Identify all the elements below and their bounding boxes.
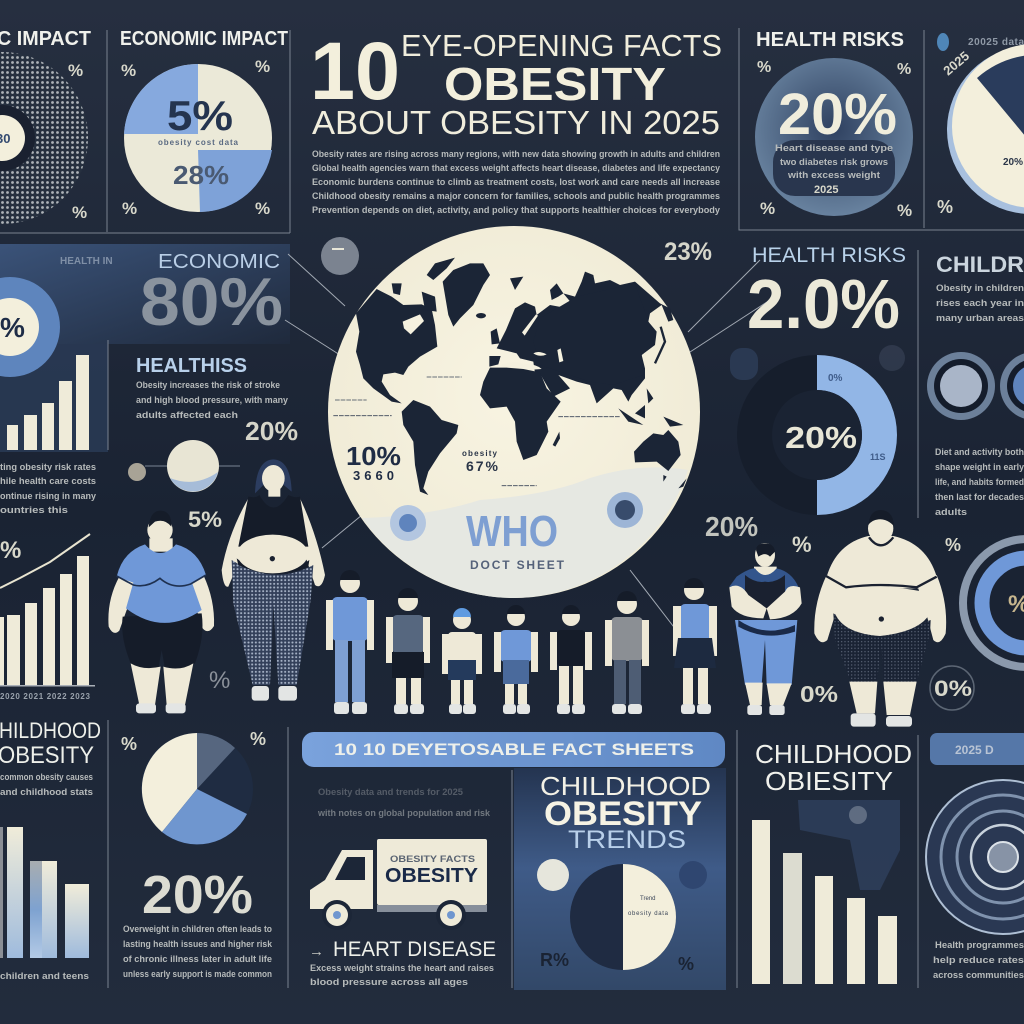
stat: 23 percent: 23% (664, 238, 712, 266)
continent: south america (402, 400, 458, 495)
child 3 (442, 608, 482, 714)
panel: health risks middle: 2.0% (747, 265, 900, 343)
panel: pie and 20 percent bottom: 20% (142, 865, 253, 925)
panel: childhood right: many urban areas (936, 313, 1024, 324)
panel: pie and 20 percent bottom: lasting health issues and higher risk (123, 939, 273, 950)
child 6 (605, 591, 649, 714)
text block: heart disease (310, 963, 494, 988)
svalbard (510, 277, 523, 290)
arctic islands (392, 258, 455, 312)
panel: childhood obesity right bars: OBIESITY (765, 766, 893, 796)
text block: under banner: with notes on global population and risk (317, 808, 491, 819)
panel: pie and 20 percent bottom: % (250, 729, 266, 749)
panel: childhood obesity bottom left: and childhood stats (0, 787, 93, 798)
panel: economic impact cropped: % (72, 203, 87, 222)
panel: health risks top: % (757, 59, 771, 76)
panel: health text (136, 355, 298, 446)
panel: ripple circle right: help reduce rates (933, 955, 1024, 966)
panel: health risks top: % (897, 61, 911, 78)
pie chart: obesity cost data (158, 138, 239, 147)
text block: intro (312, 149, 721, 216)
panel: ripple circle right (926, 733, 1024, 981)
panel: economic impact pie: % (255, 199, 270, 218)
panel: childhood obesity trends (514, 768, 726, 990)
panel: ripple circle right: 2025 D (955, 743, 994, 757)
stat: 10 percent: 3660 (353, 468, 394, 483)
stat: percent small: % (792, 532, 812, 557)
pie chart: 28% (173, 160, 229, 190)
icon: small badge (879, 345, 905, 371)
panel: pie top right: 20% (1003, 157, 1023, 168)
stat: 0 percent ring (930, 666, 974, 710)
panel: health risks top (755, 29, 913, 220)
text block: intro: Childhood obesity remains a major concern for families, schools and public health programmes (312, 191, 720, 202)
panel: childhood obesity right bars: CHILDHOOD (755, 739, 912, 769)
panel: childhood obesity trends: CHILDHOOD (540, 771, 711, 801)
panel: economic impact pie: % (255, 57, 270, 76)
panel: health text: adults affected each (136, 410, 238, 421)
panel: health risks top: HEALTH RISKS (756, 29, 904, 51)
iberia (489, 356, 501, 367)
label: who fact sheet: WHO (466, 507, 558, 556)
stat: 5 percent: 5% (188, 507, 222, 532)
panel: pie and 20 percent bottom: unless early support is made common (123, 969, 272, 980)
continent: australia (634, 430, 681, 471)
textured patch (798, 800, 900, 890)
panel: childhood obesity trends: TRENDS (568, 826, 686, 854)
panel: pie and 20 percent bottom: Overweight in children often leads to (123, 924, 272, 935)
icon: badge right (679, 861, 707, 889)
text block: under banner: Obesity data and trends for 2025 (318, 787, 464, 798)
pie chart: obesity data (628, 911, 669, 917)
figure: woman in blue shirt (108, 511, 214, 713)
panel: ripple circle right: across communities (933, 970, 1024, 981)
donut chart: 20% (785, 420, 857, 455)
panel: childhood obesity bottom left: OBESITY (0, 742, 94, 769)
donut chart: 11S (870, 452, 886, 462)
iceland (476, 313, 486, 318)
panel: childhood obesity bottom left: HILDHOOD (0, 718, 101, 743)
panel: childhood right: CHILDR (936, 252, 1024, 277)
asia solid fill (533, 283, 655, 385)
panel: pie top right: % (937, 197, 953, 217)
text block: left small copy: ting obesity risk rates (0, 462, 96, 473)
icon: map left: R% (540, 950, 569, 970)
title: OBESITY (444, 58, 666, 110)
bar chart (7, 355, 89, 450)
panel: ripple circle right: Health programmes (935, 940, 1024, 951)
text block: intro: Obesity rates are rising across many regions, with new data showing growth in adults and children (312, 149, 720, 160)
panel: economic impact pie: % (121, 61, 136, 80)
panel: childhood right: adults (935, 507, 967, 518)
panel: health risks top: Heart disease and type (775, 143, 893, 154)
panel: childhood obesity bottom left (0, 718, 101, 982)
madagascar (553, 432, 560, 447)
panel: economic left: HEALTH IN (60, 256, 113, 267)
panel: health risks middle: HEALTH RISKS (752, 244, 906, 267)
panel: childhood right: rises each year in (936, 298, 1024, 309)
panel: economic impact pie: % (122, 199, 137, 218)
heading: heart disease: HEART DISEASE (333, 938, 496, 961)
text block: left small copy (0, 462, 97, 516)
title: EYE-OPENING FACTS (401, 28, 722, 63)
panel: pie and 20 percent bottom: of chronic illness later in adult life (123, 954, 272, 965)
icon: right badge (607, 492, 643, 528)
icon: large target right: % (945, 535, 961, 555)
stat: map figures: obesity (462, 449, 498, 458)
panel: left donut and bars (0, 277, 89, 450)
pie chart (141, 733, 253, 845)
figures: row of children (326, 570, 717, 714)
panel: childhood right: Obesity in children (936, 283, 1024, 294)
title: 10 (310, 26, 400, 117)
panel: economic impact pie (120, 28, 288, 218)
panel: pie top right (937, 33, 1024, 217)
panel backgrounds (0, 244, 290, 452)
stat: 0 percent ring: 0% (934, 676, 972, 701)
icon: left badge (390, 505, 426, 541)
text block: intro: Global health agencies warn that excess weight affects heart disease, diabetes and life expectancy (312, 163, 721, 174)
icon: obesity truck: OBESITY (385, 865, 479, 887)
panel: health risks top: % (760, 199, 775, 218)
text block: intro: Economic burdens continue to climb as treatment costs, lost work and care needs all increase (312, 177, 720, 188)
line and bar chart left (0, 534, 95, 701)
continent: greenland (443, 263, 490, 327)
stat: 10 percent: 10% (346, 441, 401, 471)
continents (333, 258, 687, 495)
panel: pie top right: 20025 data (968, 37, 1024, 48)
banner: fact sheet: 10 10 DEYETOSABLE FACT SHEETS (334, 740, 694, 759)
lower globe shading (362, 467, 688, 598)
heading: heart disease: → (309, 943, 324, 960)
stat: zero percent mid: 0% (800, 681, 838, 707)
panel: economic left (60, 251, 283, 340)
stat: 10 percent (346, 441, 401, 483)
title (310, 26, 722, 141)
title: ABOUT OBESITY IN 2025 (312, 104, 720, 141)
connector lines (285, 254, 770, 635)
panel: childhood obesity bottom left: children and teens (0, 971, 89, 982)
continent: eurasia (497, 272, 673, 403)
panel: health risks top: 20% (778, 82, 897, 147)
donut chart (737, 355, 897, 515)
panel: health risks middle (730, 244, 906, 515)
panel: pie and 20 percent bottom (121, 729, 273, 980)
figure: large man (814, 510, 946, 727)
southeast asia islands (618, 388, 687, 488)
pie chart (570, 864, 676, 970)
bar chart (752, 820, 897, 984)
panel: economic left: 80% (140, 264, 283, 340)
icon: ring cropped (1000, 352, 1024, 420)
panel: health text: HEALTHISS (136, 355, 247, 377)
text block: heart disease: Excess weight strains the heart and raises (310, 963, 494, 974)
child 2 (386, 588, 430, 714)
child 5 (550, 605, 592, 714)
map annotations (333, 377, 620, 486)
stat: map figures (462, 449, 499, 474)
child 7 (673, 578, 717, 714)
bar chart (0, 827, 89, 958)
panel: pie top right: 2025 (940, 48, 972, 78)
icon: obesity truck (310, 839, 487, 930)
stat: 20 percent center right: 20% (705, 511, 758, 542)
panel: childhood obesity bottom left: common obesity causes (0, 772, 93, 783)
line and bar chart left: 2020 2021 2022 2023 (0, 692, 91, 701)
pie chart: Trend (640, 896, 655, 902)
panel: childhood right (927, 252, 1024, 518)
continent: africa (480, 368, 561, 460)
icon: ring (927, 352, 995, 420)
panel: economic left: ECONOMIC (158, 251, 280, 273)
text block: under banner (317, 787, 491, 819)
panel: health risks top: % (897, 201, 912, 220)
panel: pie and 20 percent bottom: % (121, 734, 137, 754)
panel: left donut and bars: % (0, 312, 25, 343)
panel: health text: 20% (245, 416, 298, 446)
seas (502, 314, 563, 370)
stat: small percent: % (209, 667, 230, 694)
child 1 (326, 570, 374, 714)
icon: map right: % (678, 954, 694, 974)
icon: pale sphere with small dot (128, 440, 240, 492)
text block: left small copy: hile health care costs (0, 476, 96, 487)
panel: economic impact pie: ECONOMIC IMPACT (120, 28, 288, 50)
panel: health text: and high blood pressure, with many (136, 395, 289, 406)
icon: globe marker (321, 237, 359, 275)
pie chart (124, 64, 272, 212)
icon: large target right (945, 535, 1024, 667)
icon: faded map patch (730, 348, 758, 380)
text block: left small copy: ontinue rising in many (0, 491, 97, 502)
panel: childhood obesity trends: OBESITY (544, 795, 702, 833)
panel: health risks top: two diabetes risk grows (780, 157, 888, 168)
text block: intro: Prevention depends on diet, activity, and policy that supports healthier choices for everybody (312, 205, 721, 216)
banner: fact sheet (302, 732, 725, 767)
world map globe (328, 226, 700, 598)
hudson bay (403, 314, 424, 334)
icon: badge left (537, 859, 569, 891)
panel: economic impact cropped (0, 28, 91, 224)
donut chart: 0% (828, 373, 843, 384)
figure: woman in black top and patterned leggings (222, 459, 325, 701)
icon: obesity truck: OBESITY FACTS (390, 854, 475, 864)
continent: north america (356, 289, 437, 403)
japan (655, 327, 665, 363)
panel: health risks top: 2025 (814, 184, 838, 196)
pie chart: 5% (167, 92, 233, 139)
child 4 (494, 605, 538, 714)
line and bar chart left: % (0, 537, 21, 564)
text block: heart disease: blood pressure across all ages (310, 977, 468, 988)
figure: woman arms crossed (729, 543, 802, 715)
label: who fact sheet: DOCT SHEET (470, 558, 565, 572)
panel: health risks top: with excess weight (787, 170, 881, 181)
text block: left small copy: ountries this (0, 505, 68, 516)
panel: health text: Obesity increases the risk of stroke (136, 380, 280, 391)
stat: map figures: 67% (466, 458, 499, 474)
panel: economic impact cropped: % (68, 61, 83, 80)
britain (491, 328, 500, 344)
panel: childhood obesity right bars (752, 739, 912, 984)
